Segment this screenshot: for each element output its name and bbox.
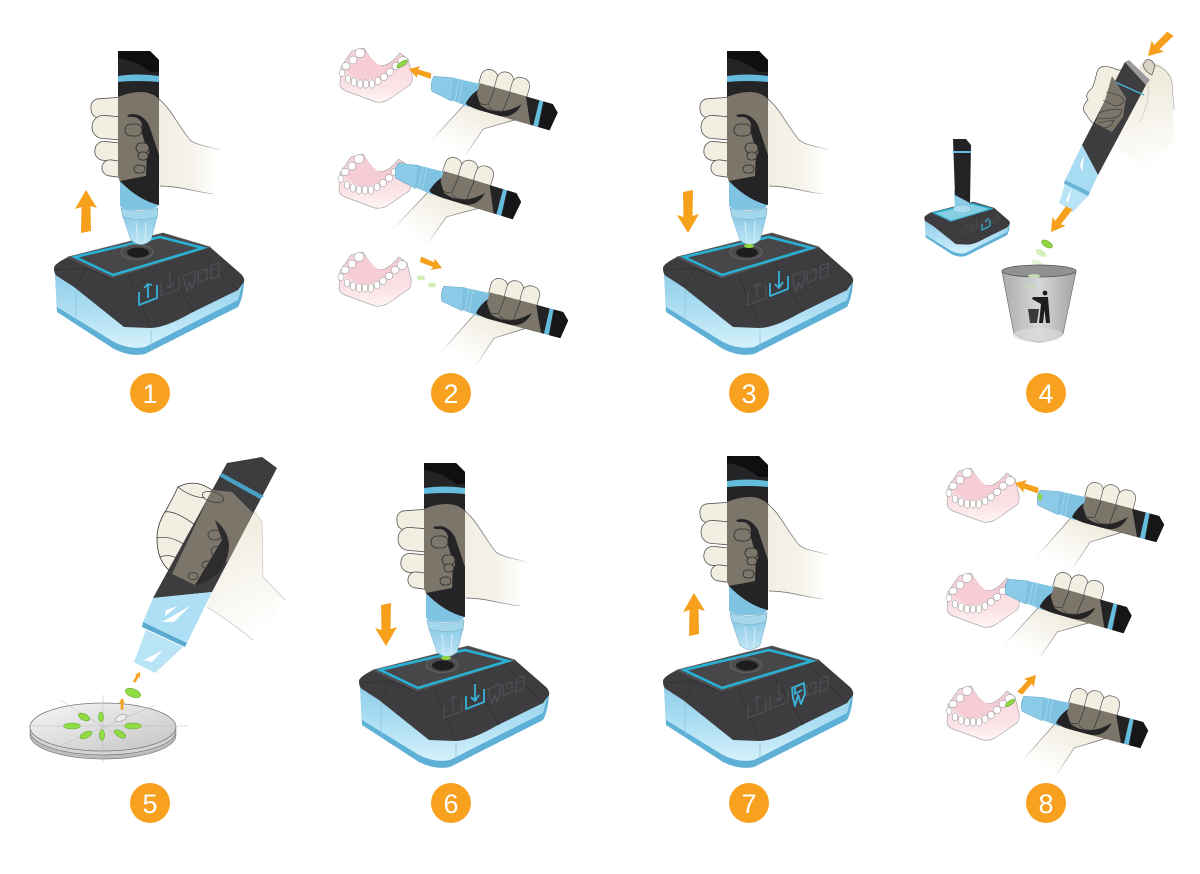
number badge 1 <box>130 373 170 413</box>
number badge 6 <box>431 783 471 823</box>
green tip <box>744 244 754 248</box>
green tip <box>1038 494 1042 500</box>
pen row 2 <box>989 556 1139 679</box>
mouth row 2 <box>946 573 1019 627</box>
number badge 7: 7 <box>741 789 757 819</box>
arrow: up <box>75 190 97 233</box>
icon: litter person <box>1028 291 1050 323</box>
green piece on tooth <box>1004 698 1016 708</box>
panel: step 4 eject into bin <box>924 27 1177 342</box>
small pen docked <box>953 139 971 213</box>
trash bin <box>1002 265 1076 342</box>
base unit <box>54 233 244 355</box>
thumb <box>1143 60 1155 75</box>
pen row 1 <box>415 53 565 176</box>
number badge 6: 6 <box>443 789 459 819</box>
arrow: right <box>418 254 444 274</box>
arrow: down <box>375 603 397 646</box>
dish <box>28 695 188 762</box>
arrow: left to tooth <box>1013 477 1041 497</box>
icon: tray up highlighted <box>139 284 157 305</box>
icon: tooth highlighted <box>792 683 805 706</box>
mouth row 3 <box>338 252 411 306</box>
panel: step 2 pick up from tooth <box>338 48 575 384</box>
small base unit <box>924 202 1010 257</box>
pen row 2 <box>378 140 528 265</box>
hand back <box>157 483 285 640</box>
panel: step 3 insert pen into base <box>663 51 853 355</box>
arrow: left to tooth <box>407 63 433 82</box>
falling green pieces <box>1030 238 1054 268</box>
mouth row 3 <box>946 686 1019 740</box>
number badge 5: 5 <box>142 789 158 819</box>
arrow: up <box>683 593 705 636</box>
pen row 3 <box>426 263 575 384</box>
pen row 3 <box>1006 673 1155 794</box>
number badge 4: 4 <box>1038 379 1054 409</box>
flying green pieces <box>417 276 436 288</box>
panel: step 1 lift pen from base <box>54 51 244 355</box>
number badge 4 <box>1026 373 1066 413</box>
panel: step 6 insert pen into base <box>359 463 549 768</box>
number badge 5 <box>130 783 170 823</box>
panel: step 8 place on tooth <box>946 467 1171 794</box>
green tip <box>441 656 451 660</box>
highlighted icon <box>982 218 990 230</box>
number badge 2: 2 <box>443 379 459 409</box>
panel: step 5 pick from dish <box>28 457 285 762</box>
panel: step 7 remove pen from base <box>663 456 853 768</box>
number badge 3: 3 <box>741 379 757 409</box>
pen row 1 <box>1022 467 1171 588</box>
lifted green piece <box>124 686 142 700</box>
tilted pen <box>134 457 277 673</box>
number badge 2 <box>431 373 471 413</box>
mouth row 2 <box>338 154 411 208</box>
arrow: small up <box>119 698 125 710</box>
base unit <box>663 233 853 355</box>
number badge 1: 1 <box>142 379 158 409</box>
number badge 8: 8 <box>1038 789 1054 819</box>
icon: tray down highlighted <box>466 684 484 709</box>
pen in hand <box>396 463 526 656</box>
arrow: top pointing at thumb <box>1142 27 1177 62</box>
cyan translucent plate <box>934 204 991 221</box>
mouth row 1 <box>339 48 412 102</box>
tilted hand <box>1083 61 1174 172</box>
number badge 8 <box>1026 783 1066 823</box>
base unit <box>663 646 853 768</box>
pen in hand <box>699 456 829 650</box>
number badge 3 <box>729 373 769 413</box>
icon: tray down highlighted <box>770 271 788 296</box>
number badge 7 <box>729 783 769 823</box>
tilted pen <box>1059 60 1150 212</box>
arrow: falling direction <box>1045 203 1076 237</box>
arrow: up-right <box>1015 671 1041 698</box>
base unit <box>359 646 549 768</box>
mouth row 1 <box>946 468 1019 522</box>
green tooth pieces <box>64 712 142 740</box>
pen in hand <box>699 51 829 244</box>
green piece on tooth <box>396 59 408 69</box>
arrow: small up-right <box>131 670 143 684</box>
pen in hand <box>90 51 220 244</box>
arrow: down <box>677 190 699 233</box>
